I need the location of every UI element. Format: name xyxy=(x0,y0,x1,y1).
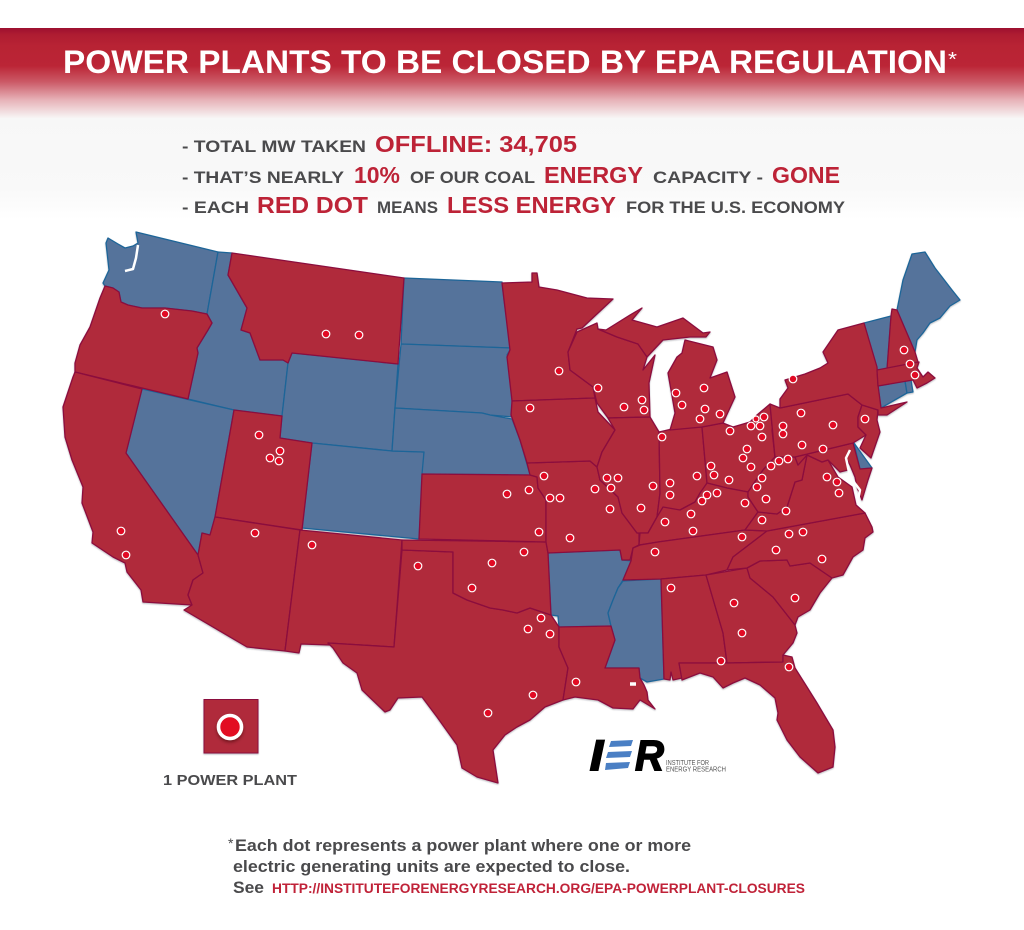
Utah xyxy=(215,410,312,530)
South Carolina xyxy=(747,560,832,625)
Massachusetts xyxy=(877,362,935,388)
Nebraska xyxy=(392,408,530,475)
key fact: total MW offline xyxy=(182,131,577,157)
Mississippi xyxy=(605,579,664,682)
Minnesota xyxy=(502,273,613,401)
Washington xyxy=(103,232,218,314)
West Virginia xyxy=(748,430,807,514)
Missouri xyxy=(527,461,639,560)
water inlets: Puget Sound, Chesapeake Bay, Lake Pontchartrain xyxy=(125,245,860,684)
key fact: each red dot: - EACH xyxy=(182,199,249,217)
logo: blue E bars xyxy=(605,740,633,770)
key fact: 10% of coal capacity: ENERGY xyxy=(544,162,643,188)
key fact: each red dot: LESS ENERGY xyxy=(447,192,616,218)
key fact: total MW offline: - TOTAL MW TAKEN xyxy=(182,138,366,156)
Kentucky xyxy=(639,483,758,545)
Virginia xyxy=(745,455,865,531)
pale background behind the key facts xyxy=(0,118,1024,220)
Wyoming xyxy=(280,353,398,451)
Texas xyxy=(328,550,568,783)
Michigan lower peninsula xyxy=(668,340,735,430)
key fact: each red dot xyxy=(182,192,845,218)
Colorado xyxy=(302,443,424,539)
title: * xyxy=(948,49,957,71)
Montana xyxy=(228,253,404,364)
Kansas xyxy=(419,474,546,542)
Louisiana xyxy=(559,626,655,709)
key fact: each red dot: RED DOT xyxy=(257,192,368,218)
IER logo: INSTITUTE FOR xyxy=(666,758,709,767)
Iowa xyxy=(511,398,615,467)
key fact: 10% of coal capacity: GONE xyxy=(772,162,840,188)
states without closures (blue) xyxy=(103,232,960,682)
key fact: 10% of coal capacity: OF OUR COAL xyxy=(410,169,535,187)
Michigan upper peninsula xyxy=(598,308,710,357)
Wisconsin xyxy=(568,323,655,418)
North Carolina xyxy=(727,513,873,578)
Illinois xyxy=(597,417,660,533)
Oregon xyxy=(75,286,212,399)
legend swatch xyxy=(204,700,258,753)
key fact: each red dot: FOR THE U.S. ECONOMY xyxy=(626,199,845,217)
North Dakota xyxy=(401,278,511,348)
source link: HTTP://INSTITUTEFORENERGYRESEARCH.ORG/EPA-POWERPLANT-CLOSURES xyxy=(272,881,805,896)
key fact: 10% of coal capacity xyxy=(182,162,840,188)
key fact: 10% of coal capacity: - THAT’S NEARLY xyxy=(182,169,344,187)
New York xyxy=(780,323,907,415)
IER logo: ENERGY RESEARCH xyxy=(666,764,726,774)
footnote: electric generating units are expected to close. xyxy=(233,858,630,876)
footnote: Each dot represents a power plant where one or more xyxy=(235,837,691,855)
IER logo: R xyxy=(635,732,664,780)
Florida xyxy=(679,655,835,773)
legend label: 1 POWER PLANT xyxy=(163,772,297,789)
US map xyxy=(63,232,960,783)
footnote: * xyxy=(228,835,234,851)
Ohio xyxy=(702,404,775,492)
Arkansas xyxy=(548,550,631,627)
Arizona xyxy=(184,517,300,651)
key fact: 10% of coal capacity: CAPACITY - xyxy=(653,169,763,187)
key fact: total MW offline: OFFLINE: 34,705 xyxy=(375,131,577,157)
South Dakota xyxy=(395,344,513,417)
Pennsylvania xyxy=(770,394,866,457)
Alabama xyxy=(661,575,727,680)
Maryland xyxy=(795,443,872,500)
Maine xyxy=(897,252,960,352)
Vermont xyxy=(864,316,891,370)
power plant dots xyxy=(117,310,919,717)
IER logo xyxy=(590,732,726,780)
Connecticut xyxy=(878,381,907,408)
footnote xyxy=(228,835,805,897)
states with closures (red) xyxy=(63,253,935,783)
Georgia xyxy=(706,568,797,663)
legend dot xyxy=(218,716,242,738)
New Mexico xyxy=(285,530,402,653)
Nevada xyxy=(126,389,234,555)
header background band xyxy=(0,28,1024,118)
Tennessee xyxy=(623,530,767,580)
Oklahoma xyxy=(402,540,551,615)
footnote: See xyxy=(233,879,264,897)
title: POWER PLANTS TO BE CLOSED BY EPA REGULATION xyxy=(63,44,947,80)
California xyxy=(63,372,203,605)
key fact: 10% of coal capacity: 10% xyxy=(354,162,400,188)
Indiana xyxy=(657,427,707,517)
Delaware xyxy=(854,443,872,469)
legend xyxy=(163,700,297,789)
New Hampshire xyxy=(887,309,918,369)
IER logo: I xyxy=(590,732,604,780)
Rhode Island xyxy=(905,380,913,393)
key fact: each red dot: MEANS xyxy=(377,199,438,217)
New Jersey xyxy=(858,405,880,458)
Idaho xyxy=(188,252,288,416)
